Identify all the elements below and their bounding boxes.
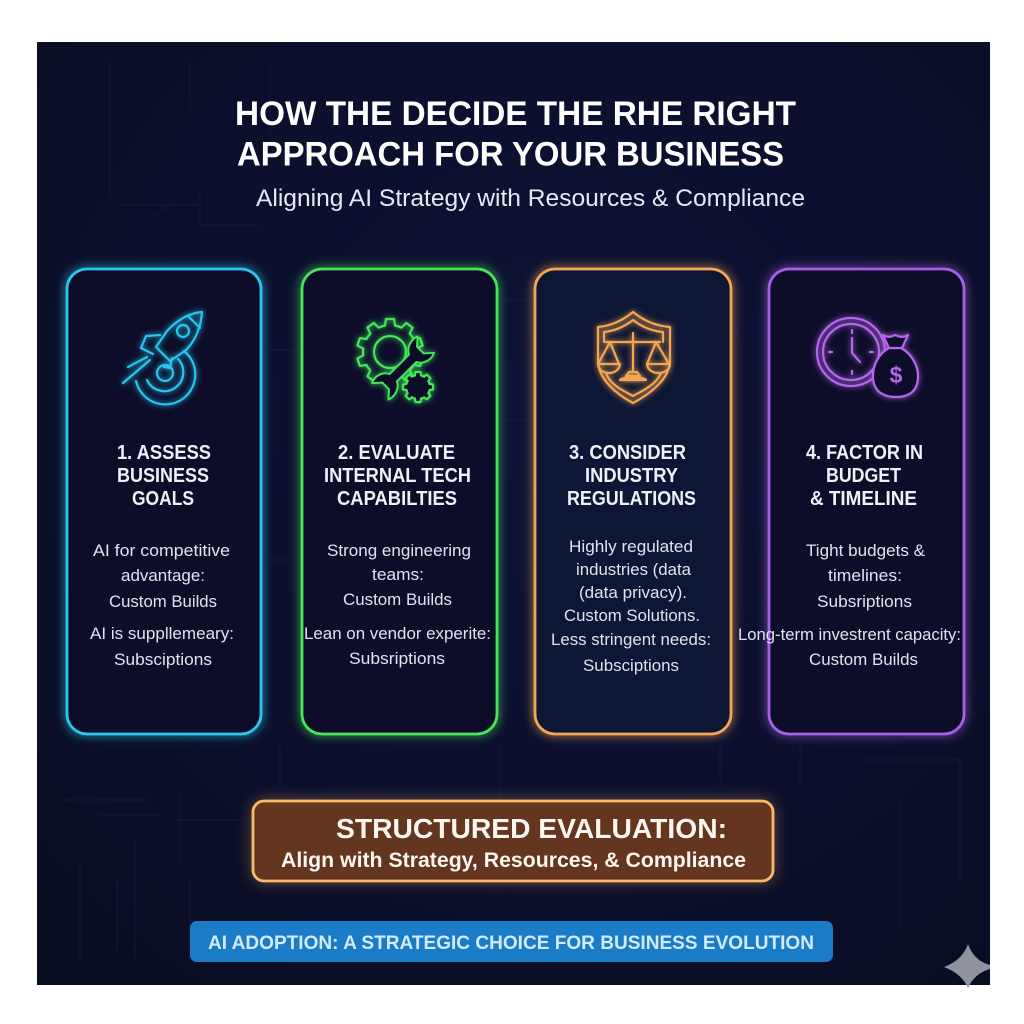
heading <box>117 442 211 510</box>
callout: structured evaluation <box>253 801 773 881</box>
heading: 1. ASSESS <box>117 442 211 464</box>
body text: Highly regulated <box>569 537 693 556</box>
body text: Custom Builds <box>343 590 452 609</box>
heading: INDUSTRY <box>585 465 679 487</box>
title <box>235 95 796 174</box>
body text: Lean on vendor experite: <box>304 624 491 643</box>
title: HOW THE DECIDE THE RHE RIGHT <box>235 95 796 133</box>
card frame: cyan <box>67 269 261 734</box>
card frame: green <box>302 269 497 734</box>
body text: Custom Builds <box>809 650 918 669</box>
body text: Custom Solutions. <box>564 606 700 625</box>
heading: REGULATIONS <box>567 488 696 510</box>
panel: consider industry regulations <box>535 269 731 734</box>
body text: Subsriptions <box>349 649 445 668</box>
heading: INTERNAL TECH <box>324 465 471 487</box>
body text: teams: <box>372 565 424 584</box>
icon: shield and scales <box>598 312 670 403</box>
body text <box>90 541 234 669</box>
icon: sparkle watermark <box>944 944 990 988</box>
callout: structured evaluation: Align with Strategy, Resources, & Compliance <box>281 848 746 872</box>
heading: BUSINESS <box>117 465 209 487</box>
body text: industries (data <box>576 560 692 579</box>
icon: gears and wrench <box>355 319 435 402</box>
card frame: purple <box>769 269 964 734</box>
title: APPROACH FOR YOUR BUSINESS <box>237 136 784 174</box>
heading: 3. CONSIDER <box>569 442 687 464</box>
card frame: orange <box>535 269 731 734</box>
body text: Long-term investrent capacity: <box>738 625 961 644</box>
body text <box>738 541 961 669</box>
body text: (data privacy). <box>579 583 687 602</box>
banner: AI adoption <box>190 921 833 962</box>
body text <box>551 537 711 675</box>
heading: 4. FACTOR IN <box>806 442 923 464</box>
heading <box>567 442 696 510</box>
heading: CAPABILTIES <box>337 488 457 510</box>
heading: BUDGET <box>826 465 901 487</box>
icon: rocket and target <box>123 312 202 404</box>
subtitle: Aligning AI Strategy with Resources & Compliance <box>256 185 805 212</box>
heading <box>806 442 923 510</box>
body text: Subsriptions <box>817 592 912 611</box>
heading: GOALS <box>132 488 194 510</box>
body text <box>304 541 491 668</box>
callout: structured evaluation: STRUCTURED EVALUATION: <box>336 813 727 844</box>
body text: Custom Builds <box>109 592 217 611</box>
heading: 2. EVALUATE <box>338 442 455 464</box>
body text: advantage: <box>121 566 205 585</box>
body text: Strong engineering <box>327 541 471 560</box>
icon: clock and money bag <box>817 318 918 397</box>
heading <box>324 442 471 510</box>
body text: AI is suppllemeary: <box>90 624 234 643</box>
panel: factor in budget and timeline <box>738 269 964 734</box>
icon: clock and money bag: $ <box>890 362 903 388</box>
banner: AI adoption: AI ADOPTION: A STRATEGIC CHOICE FOR BUSINESS EVOLUTION <box>208 932 814 954</box>
panel: assess business goals <box>67 269 261 734</box>
body text: Tight budgets & <box>806 541 926 560</box>
body text: Subsciptions <box>583 656 679 675</box>
heading: & TIMELINE <box>810 488 917 510</box>
body text: Subsciptions <box>114 650 212 669</box>
body text: AI for competitive <box>93 541 230 560</box>
body text: timelines: <box>828 566 902 585</box>
panel: evaluate internal tech <box>302 269 497 734</box>
body text: Less stringent needs: <box>551 630 711 649</box>
